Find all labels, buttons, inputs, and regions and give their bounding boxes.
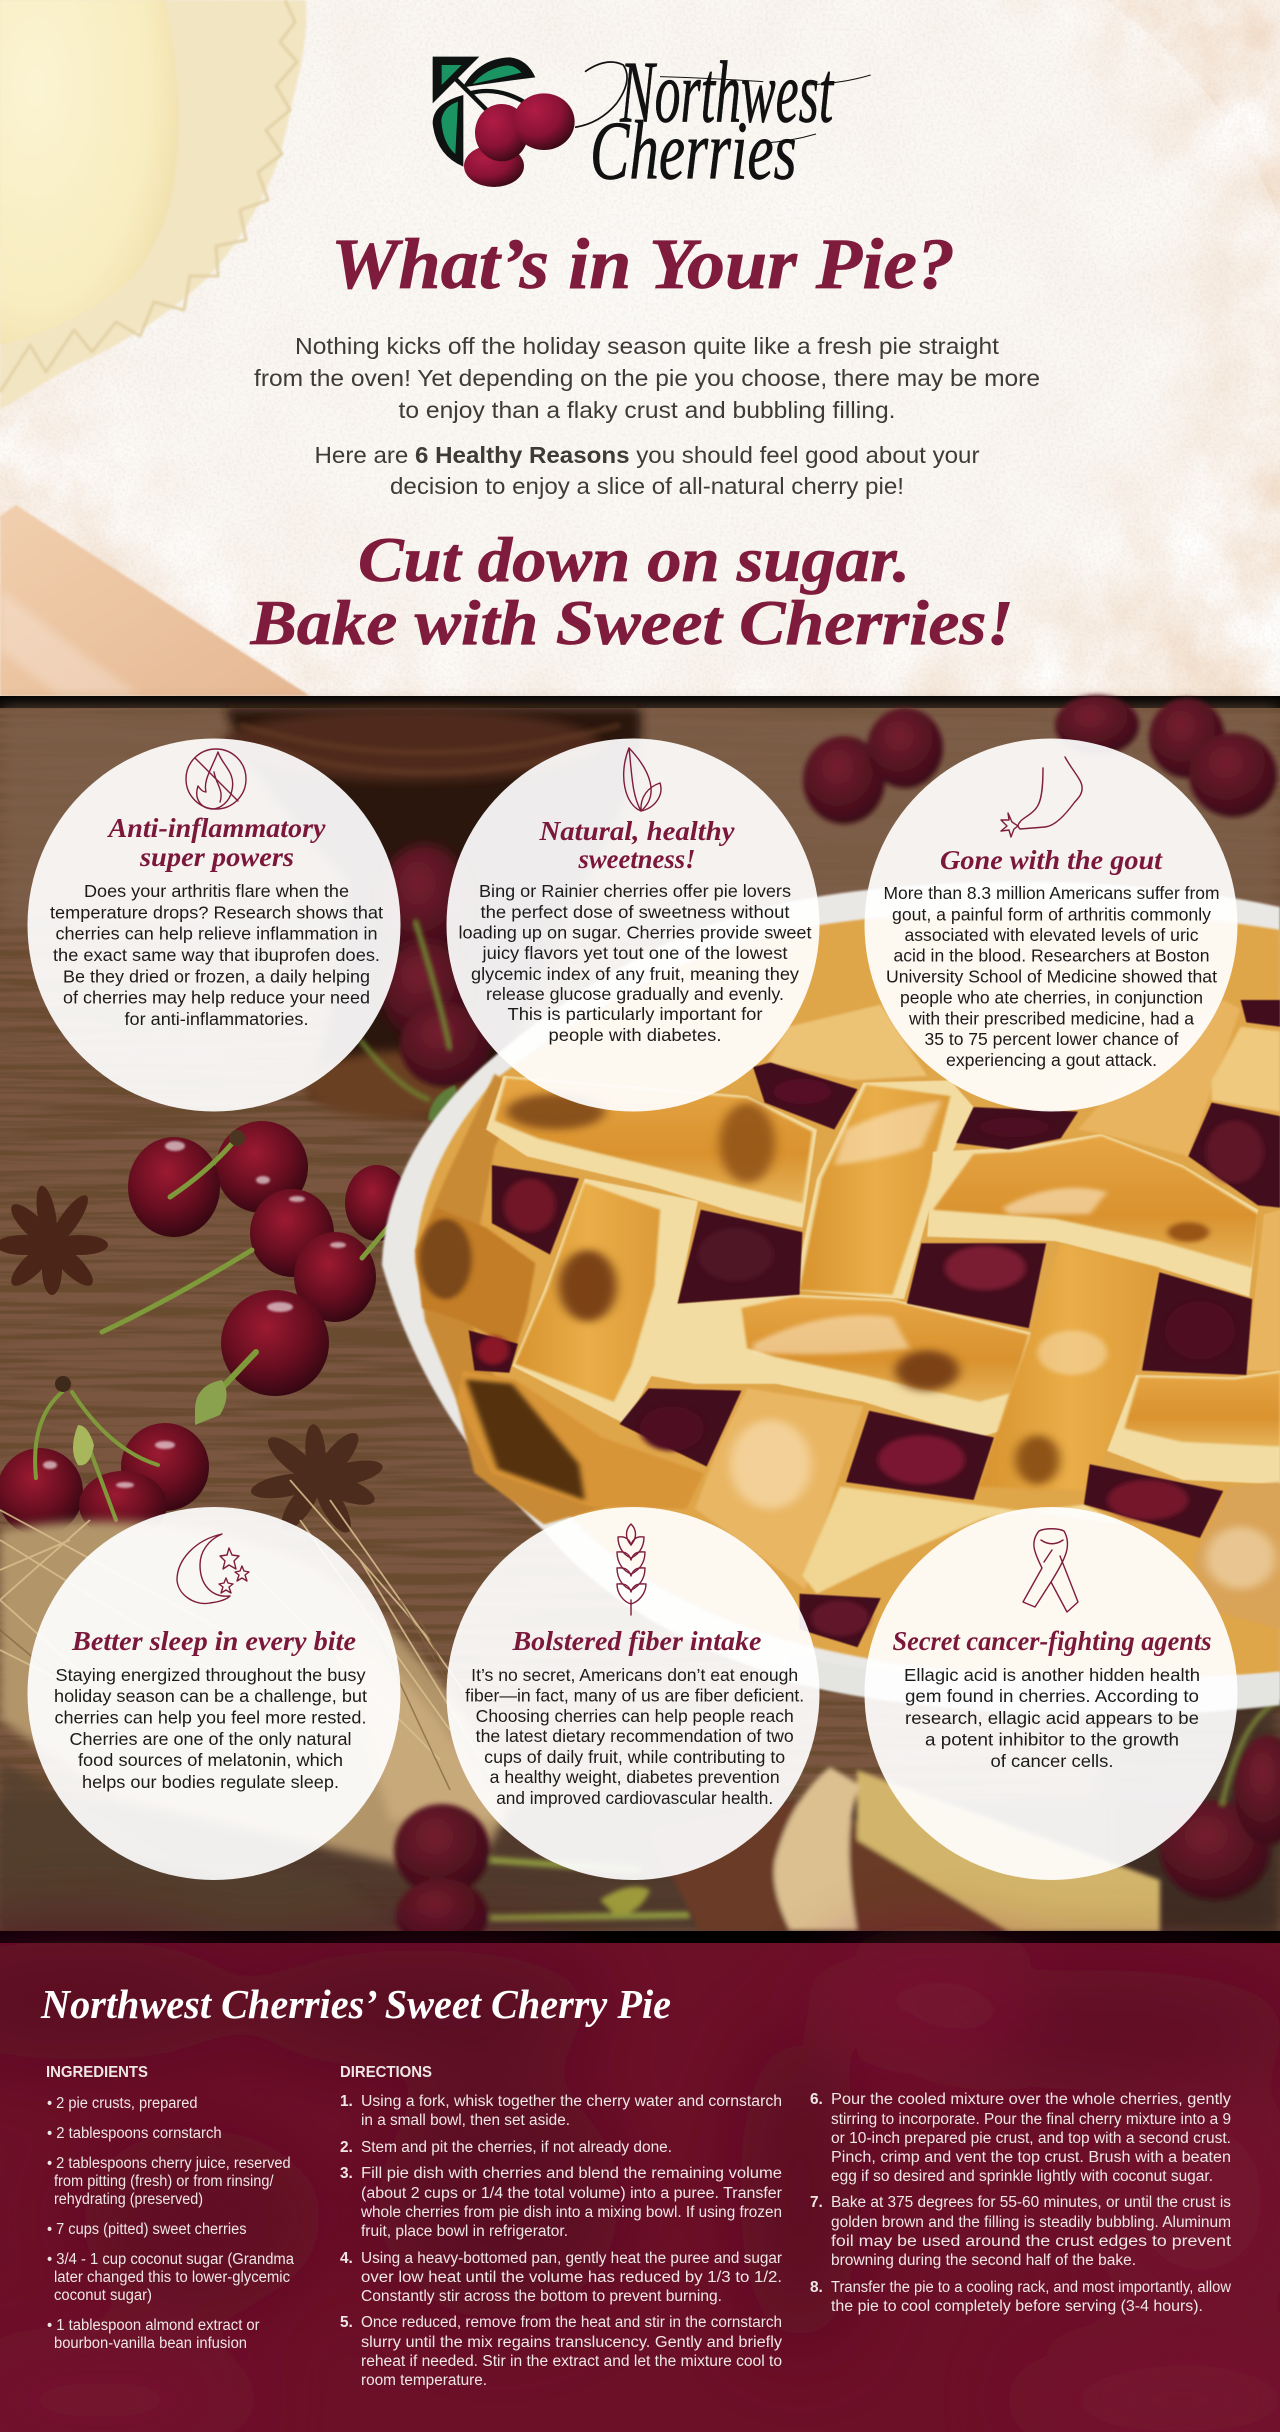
- panel: recipe background: [0, 1940, 1280, 2432]
- title: What’s in Your Pie?: [331, 224, 955, 304]
- cinnamon bundle and twine: [650, 1767, 1160, 1932]
- heading: super powers: [139, 842, 294, 872]
- directions column 1: Using a heavy-bottomed pan, gently heat the puree and sugar: [361, 2250, 782, 2267]
- body text: cherries can help relieve inflammation in: [56, 924, 378, 944]
- directions column 1: 5.: [340, 2314, 353, 2331]
- cherries left: [0, 1121, 409, 1539]
- ingredients list: • 2 tablespoons cherry juice, reserved: [47, 2155, 291, 2172]
- strip: lower vertical: [695, 1388, 863, 1589]
- ingredients list: • 3/4 - 1 cup coconut sugar (Grandma: [47, 2251, 294, 2268]
- pie crust photo top left: [0, 0, 306, 410]
- heading: Secret cancer-fighting agents: [892, 1626, 1212, 1656]
- body text: a healthy weight, diabetes prevention: [490, 1767, 780, 1787]
- directions column 1: in a small bowl, then set aside.: [361, 2112, 570, 2129]
- healthy reasons paragraph: Here are 6 Healthy Reasons you should feel good about your: [314, 442, 980, 468]
- body text: Bing or Rainier cherries offer pie lovers: [479, 881, 791, 901]
- body text: cherries can help you feel more rested.: [54, 1708, 366, 1728]
- star anise 2: [249, 1423, 385, 1537]
- strip: lower horizontal: [802, 1487, 1125, 1594]
- cherry filling windows: [469, 1000, 1280, 1647]
- body text: Staying energized throughout the busy: [56, 1665, 366, 1685]
- directions column 1: DIRECTIONS: [340, 2064, 432, 2081]
- heading: Gone with the gout: [940, 845, 1164, 875]
- strip: middle horizontal: [646, 1295, 1032, 1437]
- directions column 2: 8.: [810, 2279, 823, 2296]
- directions column 2: Transfer the pie to a cooling rack, and most importantly, allow: [831, 2279, 1232, 2296]
- strip: top right vertical: [1078, 1000, 1241, 1156]
- ingredients list: bourbon-vanilla bean infusion: [54, 2335, 247, 2352]
- ingredients list: rehydrating (preserved): [54, 2191, 203, 2208]
- body text: release glucose gradually and evenly.: [486, 984, 784, 1004]
- panel: flour background header: [0, 0, 1280, 820]
- crust: bottom left strip: [457, 1371, 704, 1509]
- heading: Anti-inflammatory: [106, 813, 327, 843]
- heading: [106, 813, 327, 872]
- heading: Natural, healthy: [538, 816, 736, 846]
- body text: Be they dried or frozen, a daily helping: [63, 966, 370, 986]
- directions column 2: Pinch, crimp and vent the top crust. Brush with a beaten: [831, 2149, 1231, 2166]
- body text: the exact same way that ibuprofen does.: [53, 945, 380, 965]
- directions column 1: reheat if needed. Stir in the extract and let the mixture cool to: [361, 2353, 782, 2370]
- body text: of cherries may help reduce your need: [63, 988, 370, 1008]
- body text: helps our bodies regulate sleep.: [82, 1772, 339, 1792]
- directions column 2: foil may be used around the crust edges to prevent: [831, 2233, 1232, 2250]
- directions column 1: Using a fork, whisk together the cherry water and cornstarch: [361, 2093, 782, 2110]
- directions column 1: 2.: [340, 2139, 353, 2156]
- icon: leaf: [624, 748, 661, 811]
- body text: a potent inhibitor to the growth: [925, 1730, 1179, 1750]
- body text: It’s no secret, Americans don’t eat enough: [471, 1665, 798, 1685]
- directions column 1: room temperature.: [361, 2372, 487, 2389]
- directions column 2: or 10-inch prepared pie crust, and top with a second crust.: [831, 2130, 1231, 2147]
- body text: [50, 881, 383, 1029]
- panel: pie photo background: [0, 695, 1280, 1951]
- directions column 1: over low heat until the volume has reduced by 1/3 to 1/2.: [361, 2269, 782, 2286]
- cherry filling mottling: [477, 1079, 1264, 1636]
- logo wordmark: Cherries: [590, 105, 797, 197]
- strip: right center vertical: [979, 1243, 1159, 1491]
- directions column 1: (about 2 cups or 1/4 the total volume) into a puree. Transfer: [361, 2185, 782, 2202]
- rolling pin: [0, 505, 310, 696]
- bottom cherries and greens: [394, 1700, 1280, 1951]
- panel: fiber: [446, 1507, 820, 1880]
- directions column 2: Bake at 375 degrees for 55-60 minutes, or until the crust is: [831, 2194, 1231, 2211]
- body text: of cancer cells.: [990, 1751, 1114, 1771]
- panel: gout: [864, 738, 1238, 1112]
- directions column 1: 4.: [340, 2250, 353, 2267]
- body text: holiday season can be a challenge, but: [54, 1686, 367, 1706]
- star anise 1: [0, 1184, 108, 1295]
- body text: and improved cardiovascular health.: [496, 1788, 773, 1808]
- body text: [54, 1665, 367, 1792]
- body text: fiber—in fact, many of us are fiber deficient.: [465, 1686, 804, 1706]
- directions column 1: Fill pie dish with cherries and blend the remaining volume: [361, 2165, 782, 2182]
- wheat stalks: [0, 1480, 520, 1932]
- ingredients list: from pitting (fresh) or from rinsing/: [54, 2173, 274, 2190]
- directions column 2: egg if so desired and sprinkle lightly with coconut sugar.: [831, 2168, 1213, 2185]
- basket: [220, 708, 641, 1125]
- body text: acid in the blood. Researchers at Boston: [894, 946, 1210, 966]
- panel: natural sweetness: [446, 738, 820, 1112]
- crust: right lower corner: [1194, 1482, 1280, 1629]
- recipe title: Northwest Cherries’ Sweet Cherry Pie: [40, 1981, 671, 2027]
- ingredients list: coconut sugar): [54, 2287, 152, 2304]
- body text: the latest dietary recommendation of two: [476, 1726, 794, 1746]
- black divider top: [0, 696, 1280, 708]
- body text: [465, 1665, 804, 1808]
- body text: Choosing cherries can help people reach: [476, 1706, 794, 1726]
- body text: cups of daily fruit, while contributing to: [484, 1747, 785, 1767]
- healthy reasons paragraph: decision to enjoy a slice of all-natural cherry pie!: [390, 473, 904, 499]
- strip: right horizontal: [927, 1134, 1258, 1297]
- logo wordmark: [575, 44, 871, 197]
- panel: better sleep: [28, 1507, 400, 1880]
- tagline: [249, 524, 1014, 658]
- ingredients list: • 7 cups (pitted) sweet cherries: [47, 2221, 247, 2238]
- ingredients list: INGREDIENTS: [46, 2064, 148, 2081]
- wood table: [0, 708, 1280, 1932]
- body text: loading up on sugar. Cherries provide sweet: [458, 923, 812, 943]
- pie crust base: [415, 911, 1280, 1678]
- directions column 1: fruit, place bowl in refrigerator.: [361, 2223, 568, 2240]
- heading: Better sleep in every bite: [71, 1626, 356, 1656]
- body text: experiencing a gout attack.: [946, 1050, 1157, 1070]
- body text: Ellagic acid is another hidden health: [904, 1665, 1200, 1685]
- body text: with their prescribed medicine, had a: [908, 1008, 1194, 1028]
- directions column 1: whole cherries from pie dish into a mixing bowl. If using frozen: [360, 2204, 782, 2221]
- intro paragraph: [254, 333, 1040, 423]
- cherries top right: [803, 695, 1277, 824]
- directions column 1: Constantly stir across the bottom to prevent burning.: [361, 2288, 722, 2305]
- icon: flame crossed out: [186, 749, 246, 809]
- lattice crust: [415, 1000, 1280, 1647]
- strip: left vertical: [512, 1179, 698, 1424]
- directions column 2: the pie to cool completely before serving (3-4 hours).: [831, 2298, 1203, 2315]
- body text: More than 8.3 million Americans suffer from: [884, 883, 1220, 903]
- body text: juicy flavors yet tout one of the lowest: [481, 943, 788, 963]
- body text: for anti-inflammatories.: [124, 1009, 308, 1029]
- directions column 2: [810, 2091, 1232, 2315]
- directions column 1: Once reduced, remove from the heat and stir in the cornstarch: [361, 2314, 782, 2331]
- body text: food sources of melatonin, which: [78, 1750, 343, 1770]
- body text: University School of Medicine showed that: [886, 966, 1217, 986]
- body text: This is particularly important for: [508, 1004, 763, 1024]
- black divider bottom: [0, 1931, 1280, 1943]
- body text: associated with elevated levels of uric: [904, 925, 1199, 945]
- strip: right lower horizontal: [1107, 1371, 1280, 1484]
- body text: gem found in cherries. According to: [905, 1686, 1199, 1706]
- directions column 2: 6.: [810, 2091, 823, 2108]
- strip: far right vertical: [1246, 1210, 1280, 1371]
- directions column 2: Pour the cooled mixture over the whole cherries, gently: [831, 2091, 1231, 2108]
- logo: Northwest Cherries: [433, 44, 871, 197]
- healthy reasons paragraph: [314, 442, 980, 499]
- strip: top horizontal: [486, 1076, 817, 1228]
- pie dish: [382, 882, 1280, 1712]
- body text: Does your arthritis flare when the: [84, 881, 349, 901]
- heading: sweetness!: [578, 844, 696, 874]
- directions column 1: [340, 2064, 782, 2389]
- logo icon: leaves and cherries: [433, 57, 575, 187]
- ingredients list: [46, 2064, 294, 2352]
- intro paragraph: from the oven! Yet depending on the pie you choose, there may be more: [254, 365, 1040, 391]
- ingredients list: • 2 tablespoons cornstarch: [47, 2125, 222, 2142]
- outer crust ring: [415, 1074, 614, 1525]
- intro paragraph: to enjoy than a flaky crust and bubbling filling.: [398, 397, 896, 423]
- tagline: Cut down on sugar.: [358, 524, 910, 595]
- ingredients list: • 1 tablespoon almond extract or: [47, 2317, 260, 2334]
- body text: research, ellagic acid appears to be: [905, 1708, 1199, 1728]
- directions column 1: Stem and pit the cherries, if not already done.: [361, 2139, 672, 2156]
- directions column 1: slurry until the mix regains translucency. Gently and briefly: [361, 2334, 782, 2351]
- heading: Bolstered fiber intake: [511, 1626, 762, 1656]
- directions column 2: 7.: [810, 2194, 823, 2211]
- ingredients list: later changed this to lower-glycemic: [54, 2269, 290, 2286]
- directions column 1: 1.: [340, 2093, 353, 2110]
- strip: upper vertical: [794, 1080, 974, 1299]
- tagline: Bake with Sweet Cherries!: [249, 587, 1014, 658]
- body text: people who ate cherries, in conjunction: [900, 988, 1203, 1008]
- icon: moon and stars: [177, 1534, 249, 1603]
- strip: top right pale: [1212, 1027, 1280, 1112]
- directions column 2: stirring to incorporate. Pour the final cherry mixture into a 9: [831, 2111, 1231, 2128]
- body text: glycemic index of any fruit, meaning they: [471, 964, 799, 984]
- crust: browned left edge: [416, 1208, 535, 1348]
- strip: top center: [768, 1004, 927, 1080]
- body text: [884, 883, 1220, 1070]
- directions column 1: 3.: [340, 2165, 353, 2182]
- body text: Cherries are one of the only natural: [70, 1729, 352, 1749]
- panel: anti-inflammatory: [28, 738, 400, 1112]
- body text: temperature drops? Research shows that: [50, 902, 383, 922]
- ingredients list: • 2 pie crusts, prepared: [47, 2095, 198, 2112]
- dish rim bottom edge: [790, 1655, 1280, 1715]
- heading: [538, 816, 736, 874]
- panel: cancer: [864, 1507, 1238, 1880]
- body text: [904, 1665, 1200, 1771]
- body text: the perfect dose of sweetness without: [480, 902, 790, 922]
- icon: wheat: [617, 1524, 646, 1615]
- body text: [458, 881, 812, 1045]
- icon: ribbon: [1023, 1529, 1078, 1612]
- directions column 2: browning during the second half of the bake.: [831, 2252, 1136, 2269]
- icon: foot: [1001, 757, 1082, 837]
- body text: gout, a painful form of arthritis commonly: [892, 904, 1211, 924]
- intro paragraph: Nothing kicks off the holiday season quite like a fresh pie straight: [295, 333, 999, 359]
- directions column 2: golden brown and the filling is steadily bubbling. Aluminum: [831, 2214, 1231, 2231]
- body text: people with diabetes.: [548, 1025, 722, 1045]
- logo wordmark: Northwest: [619, 44, 835, 142]
- body text: 35 to 75 percent lower chance of: [924, 1029, 1179, 1049]
